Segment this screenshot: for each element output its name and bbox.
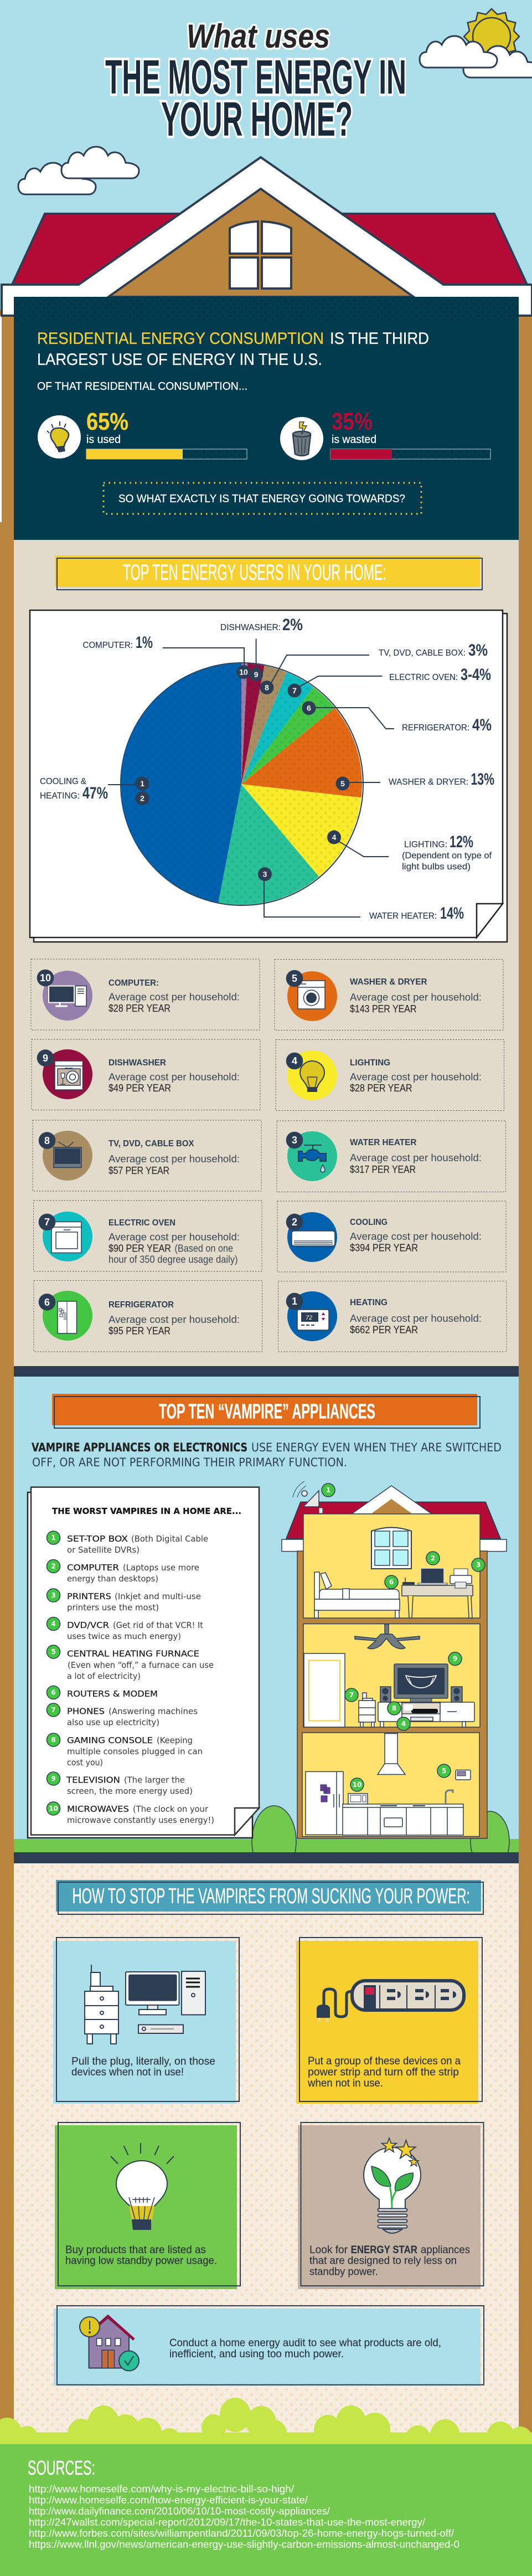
pie labels: DISHWASHER:	[220, 623, 281, 632]
list item 6: ROUTERS & MODEM	[67, 1689, 158, 1699]
tip card: low standby	[55, 2122, 240, 2289]
list item 8: GAMING CONSOLE	[67, 1735, 153, 1745]
pie labels: COOLING &	[40, 777, 86, 786]
pie number badges	[135, 665, 350, 881]
icon: electronics	[85, 1965, 205, 2044]
sources list: https://www.llnl.gov/news/american-energy-use-slightly-carbon-emissions-almost-unchanged-0	[29, 2539, 459, 2550]
intro text: VAMPIRE APPLIANCES OR ELECTRONICS	[32, 1441, 247, 1454]
card: computer: Average cost per household:	[109, 991, 240, 1002]
sun and clouds, top right	[420, 9, 532, 78]
card: washer and dryer: Average cost per household:	[350, 991, 482, 1003]
sources list	[29, 2484, 459, 2550]
desk with laptop, printer, router	[402, 1568, 473, 1618]
card: electric oven: Average cost per household:	[109, 1231, 240, 1243]
list item 1: (Both Digital Cable	[131, 1534, 208, 1544]
list item 8: multiple consoles plugged in can	[67, 1746, 203, 1756]
icon: house audit	[80, 2316, 139, 2371]
attic window	[230, 221, 291, 288]
sources list: http://www.forbes.com/sites/williampentland/2011/09/03/top-26-home-energy-hogs-turned-off/	[29, 2528, 454, 2539]
card: heating: $662 PER YEAR	[350, 1325, 418, 1336]
icon: trash can	[280, 417, 323, 460]
tip card: pull the plug	[53, 1938, 239, 2104]
card: computer	[31, 959, 260, 1030]
list item 5: a lot of electricity)	[67, 1671, 141, 1681]
vampire location badges: 2	[431, 1554, 435, 1562]
card: electric oven	[34, 1201, 262, 1271]
vampire location badges: 9	[453, 1655, 457, 1663]
pie labels: TV, DVD, CABLE BOX:	[379, 648, 466, 658]
pie labels: 14%	[440, 904, 464, 923]
pie labels: 47%	[82, 784, 108, 802]
list item 10: MICROWAVES	[67, 1804, 129, 1814]
vampire location badges: 10	[353, 1781, 361, 1789]
list item 9: (The larger the	[124, 1775, 185, 1785]
tip card: home energy audit	[54, 2306, 484, 2386]
tip card: power strip: when not in use.	[307, 2078, 383, 2089]
headline: RESIDENTIAL ENERGY CONSUMPTION	[37, 329, 324, 348]
list item 2	[47, 1559, 199, 1584]
heading banner	[56, 1880, 483, 1914]
title script line: What uses	[187, 18, 330, 55]
subheading: OF THAT RESIDENTIAL CONSUMPTION...	[37, 380, 247, 393]
card: tv dvd cable box: 8	[44, 1135, 50, 1146]
pie labels: 12%	[450, 833, 473, 851]
pie labels: 4%	[472, 716, 492, 734]
list item 8	[47, 1733, 203, 1768]
door	[304, 1653, 345, 1727]
tip card: energy star	[298, 2122, 484, 2289]
headline	[37, 329, 429, 369]
pie labels: 3-4%	[461, 666, 491, 684]
tip card: energy star: standby power.	[309, 2266, 378, 2278]
icon: plant bulb	[364, 2138, 421, 2233]
list item 5: (Even when “off,” a furnace can use	[68, 1660, 214, 1670]
list item 7	[47, 1703, 198, 1728]
sources heading: SOURCES:	[28, 2456, 95, 2479]
pie labels	[40, 616, 494, 923]
panel: how to stop the vampires	[14, 1852, 519, 2436]
heading banner	[52, 1394, 480, 1428]
card: lighting: Average cost per household:	[350, 1071, 482, 1083]
list item 8: cost you)	[67, 1758, 103, 1768]
pie number badges: 4	[332, 833, 337, 842]
card: heating: Average cost per household:	[350, 1312, 482, 1324]
intro text: OFF, OR ARE NOT PERFORMING THEIR PRIMARY FUNCTION.	[32, 1456, 347, 1469]
card: electric oven: hour of 350 degree usage daily)	[109, 1254, 238, 1265]
faucet	[446, 1790, 453, 1804]
vampire location badges: 5	[442, 1767, 446, 1775]
tip card: pull the plug: devices when not in use!	[71, 2067, 184, 2078]
card: water heater: 3	[292, 1135, 297, 1146]
card: water heater: $317 PER YEAR	[350, 1164, 416, 1175]
house roof	[282, 1486, 507, 1552]
pie labels: (Dependent on type of	[402, 851, 492, 861]
pie number badges: 5	[340, 779, 345, 788]
room middle	[303, 1624, 480, 1727]
bush right	[471, 1811, 509, 1871]
list item 7: 7	[51, 1706, 56, 1714]
pie number badges: 7	[292, 686, 297, 695]
bush behind list	[252, 1806, 296, 1877]
list item 6: 6	[51, 1689, 56, 1697]
card: tv dvd cable box: TV, DVD, CABLE BOX	[109, 1139, 194, 1148]
paper sheet	[30, 610, 507, 942]
room upper	[303, 1514, 480, 1618]
vampire location badges	[322, 1483, 485, 1791]
card: computer: $28 PER YEAR	[109, 1003, 171, 1014]
pie chart	[121, 663, 363, 905]
card: water heater: WATER HEATER	[350, 1138, 417, 1147]
stat: 35% wasted: is wasted	[332, 434, 376, 446]
list item 1: SET-TOP BOX	[67, 1534, 128, 1544]
card: electric oven: ELECTRIC OVEN	[109, 1218, 175, 1228]
satellite dish	[293, 1481, 323, 1513]
card: refrigerator: REFRIGERATOR	[109, 1300, 174, 1310]
card: water heater	[277, 1121, 506, 1192]
pie labels: LIGHTING:	[404, 840, 447, 849]
card: dishwasher: Average cost per household:	[109, 1071, 240, 1083]
list item 8: 8	[51, 1736, 56, 1744]
list item 5: CENTRAL HEATING FURNACE	[67, 1649, 199, 1659]
card: refrigerator	[34, 1281, 262, 1352]
title line two: YOUR HOME?	[161, 92, 353, 146]
icon: light bulb	[38, 415, 81, 458]
pie number badges: 9	[254, 670, 259, 679]
bushes	[0, 2398, 532, 2454]
house illustration	[282, 1481, 507, 1838]
card: dishwasher: 9	[43, 1053, 48, 1064]
pie labels: ELECTRIC OVEN:	[389, 673, 458, 682]
list item 6	[47, 1686, 158, 1699]
kitchen fridge	[306, 1771, 343, 1835]
list item 4: (Get rid of that VCR! It	[113, 1620, 203, 1630]
card: tv dvd cable box: $57 PER YEAR	[109, 1165, 169, 1176]
card: cooling: $394 PER YEAR	[350, 1243, 418, 1254]
pie number badges: 2	[140, 794, 144, 803]
list item 4: 4	[51, 1620, 56, 1628]
pie number badges: 3	[263, 870, 267, 879]
panel: sources	[0, 2444, 532, 2576]
vampire location badges: 3	[476, 1561, 481, 1569]
microwave	[348, 1794, 368, 1804]
list item 1: 1	[51, 1534, 56, 1542]
stat: 65% used	[86, 408, 247, 459]
pie labels: 3%	[468, 641, 488, 660]
card: heating: 1	[292, 1296, 297, 1307]
speakers	[380, 1687, 462, 1702]
card: cooling: Average cost per household:	[350, 1230, 482, 1242]
pie labels: 2%	[282, 616, 303, 634]
tip card: power strip	[296, 1938, 482, 2104]
list item 3: printers use the most)	[67, 1603, 159, 1612]
list item 4: uses twice as much energy)	[67, 1631, 181, 1641]
vampire location badges: 6	[389, 1578, 394, 1586]
card: cooling: 2	[292, 1217, 297, 1228]
stat: 35% wasted: 35%	[332, 408, 373, 435]
vampire location badges: 1	[326, 1486, 330, 1494]
stat: 35% wasted	[330, 408, 490, 459]
tip card: energy star: Look for	[309, 2244, 348, 2256]
tip card: power strip: Put a group of these devices on a	[308, 2055, 461, 2067]
list item 3	[47, 1589, 201, 1612]
tip card: home energy audit: Conduct a home energy audit to see what products are old,	[169, 2337, 441, 2349]
tip card: low standby: having low standby power usage.	[65, 2255, 217, 2267]
list item 10	[47, 1802, 214, 1825]
card: cooling	[277, 1201, 506, 1272]
card: water heater: Average cost per household:	[350, 1152, 482, 1163]
card: heating: HEATING	[350, 1298, 388, 1307]
pie number badges: 1	[140, 779, 144, 788]
heading banner	[55, 555, 482, 590]
pie leader lines	[108, 639, 394, 917]
headline: LARGEST USE OF ENERGY IN THE U.S.	[37, 351, 322, 369]
list item 7: PHONES	[67, 1707, 105, 1717]
card: computer: COMPUTER:	[109, 978, 159, 988]
list item 5: 5	[51, 1648, 56, 1656]
card: heating	[278, 1281, 507, 1352]
card: dishwasher: $49 PER YEAR	[109, 1083, 171, 1094]
list item 7: (Answering machines	[109, 1707, 198, 1717]
card: lighting: LIGHTING	[350, 1058, 390, 1068]
clouds, left	[18, 147, 139, 194]
card: tv dvd cable box: Average cost per household:	[109, 1153, 240, 1165]
card: lighting: 4	[292, 1055, 297, 1067]
callout: so what exactly: SO WHAT EXACTLY IS THAT ENERGY GOING TOWARDS?	[118, 493, 405, 505]
card: refrigerator: Average cost per household:	[109, 1313, 240, 1325]
sky background	[0, 0, 532, 332]
pie labels: 13%	[471, 770, 494, 789]
icon: power strip	[317, 1981, 464, 2022]
card: refrigerator: $95 PER YEAR	[109, 1326, 171, 1337]
list item 3: (Inkjet and multi-use	[115, 1591, 201, 1601]
tip card: power strip: power strip and turn off the strip	[308, 2067, 459, 2078]
intro text	[32, 1441, 502, 1469]
card: lighting	[276, 1040, 504, 1111]
panel: top ten energy users	[14, 540, 519, 1366]
tv with fangs	[394, 1664, 448, 1702]
card: dishwasher: DISHWASHER	[109, 1058, 166, 1068]
heading banner: TOP TEN “VAMPIRE” APPLIANCES	[159, 1400, 375, 1424]
list item 3: PRINTERS	[67, 1591, 111, 1601]
list item 2: energy than desktops)	[67, 1574, 158, 1584]
phone table	[359, 1693, 375, 1727]
list item 7: also use up electricity)	[67, 1718, 159, 1728]
pie number badges: 10	[239, 668, 248, 677]
card: heating: 72	[306, 1315, 312, 1321]
intro text: USE ENERGY EVEN WHEN THEY ARE SWITCHED	[251, 1441, 502, 1454]
title	[105, 18, 406, 146]
house roof	[2, 157, 532, 316]
list item 9	[47, 1772, 193, 1796]
vampire location badges: 4	[401, 1720, 406, 1728]
pie labels: 1%	[136, 633, 153, 652]
list item 9: screen, the more energy used)	[67, 1786, 193, 1796]
sources list: http://247wallst.com/special-report/2012/09/17/the-10-states-that-use-the-most-energy/	[29, 2517, 425, 2528]
card: electric oven: 7	[44, 1217, 50, 1228]
vampire location badges: 7	[349, 1691, 354, 1699]
tip card: low standby: Buy products that are listed as	[65, 2244, 206, 2256]
tip card: home energy audit: inefficient, and using too much power.	[169, 2348, 344, 2360]
kitchen counter	[343, 1804, 463, 1835]
vampire location badges: 8	[392, 1704, 396, 1712]
list item 5	[47, 1645, 214, 1681]
card: computer: 10	[40, 972, 51, 983]
headline: IS THE THIRD	[330, 329, 429, 348]
card: cooling: COOLING	[350, 1218, 388, 1227]
pie labels: REFRIGERATOR:	[402, 723, 469, 733]
list item 4: DVD/VCR	[67, 1620, 109, 1630]
sources list: http://www.dailyfinance.com/2010/06/10/10-most-costly-appliances/	[29, 2506, 330, 2517]
panel: vampire appliances	[14, 1366, 519, 1877]
pie number badges: 6	[307, 704, 311, 713]
pie labels: COMPUTER:	[83, 641, 133, 650]
room lower	[302, 1733, 479, 1836]
media console	[378, 1702, 474, 1727]
card: tv dvd cable box	[33, 1120, 261, 1191]
tip card: energy star: appliances	[421, 2244, 470, 2256]
card: electric oven: $90 PER YEAR	[109, 1243, 171, 1254]
list item 10: (The clock on your	[133, 1804, 209, 1814]
panel: worst vampires list	[28, 1487, 259, 1838]
pie labels: HEATING:	[40, 791, 80, 801]
list item 1	[47, 1531, 208, 1555]
list item 9: TELEVISION	[66, 1775, 120, 1785]
ground	[14, 1839, 519, 1852]
card: washer and dryer: 5	[292, 973, 297, 984]
card: washer and dryer: WASHER & DRYER	[350, 977, 427, 987]
card: washer and dryer: $143 PER YEAR	[350, 1003, 416, 1014]
bedroom window	[371, 1527, 411, 1569]
sources list: http://www.homeselfe.com/why-is-my-electric-bill-so-high/	[29, 2484, 294, 2495]
list item 10: 10	[49, 1805, 58, 1812]
list item 9: 9	[51, 1775, 56, 1782]
ceiling fan	[355, 1624, 420, 1649]
range hood	[378, 1733, 405, 1774]
card: washer and dryer	[275, 959, 503, 1030]
sources list: http://www.homeselfe.com/how-energy-efficient-is-your-state/	[29, 2495, 308, 2506]
tip card: pull the plug: Pull the plug, literally, on those	[71, 2055, 215, 2067]
bed	[314, 1572, 400, 1618]
stat: 65% used: is used	[86, 434, 121, 446]
list item 2: COMPUTER	[67, 1563, 119, 1573]
list heading: THE WORST VAMPIRES IN A HOME ARE...	[52, 1506, 241, 1516]
stat: 65% used: 65%	[86, 408, 128, 435]
pie labels: WATER HEATER:	[369, 911, 437, 921]
list item 10: microwave constantly uses energy!)	[67, 1815, 214, 1825]
tip card: energy star: that are designed to rely less on	[309, 2255, 457, 2267]
pie number badges: 8	[265, 683, 269, 692]
list item 4	[47, 1617, 203, 1641]
tip card: energy star: ENERGY STAR	[351, 2244, 417, 2256]
card: refrigerator: 6	[44, 1297, 50, 1308]
pie labels: light bulbs used)	[402, 862, 471, 872]
card: electric oven: (Based on one	[175, 1243, 233, 1254]
list item 1: or Satellite DVRs)	[67, 1545, 140, 1555]
thermostat	[456, 1770, 471, 1780]
house body	[297, 1551, 487, 1838]
panel: residential consumption	[14, 297, 519, 540]
list item 8: (Keeping	[157, 1735, 193, 1745]
card: lighting: $28 PER YEAR	[350, 1083, 412, 1094]
pie labels: WASHER & DRYER:	[389, 777, 468, 787]
icon: light bulb	[111, 2143, 174, 2230]
card: dishwasher	[32, 1039, 260, 1110]
list item 2: 2	[51, 1563, 56, 1570]
callout: so what exactly	[104, 483, 421, 514]
list item 3: 3	[51, 1591, 56, 1599]
list item 2: (Laptops use more	[123, 1563, 199, 1573]
